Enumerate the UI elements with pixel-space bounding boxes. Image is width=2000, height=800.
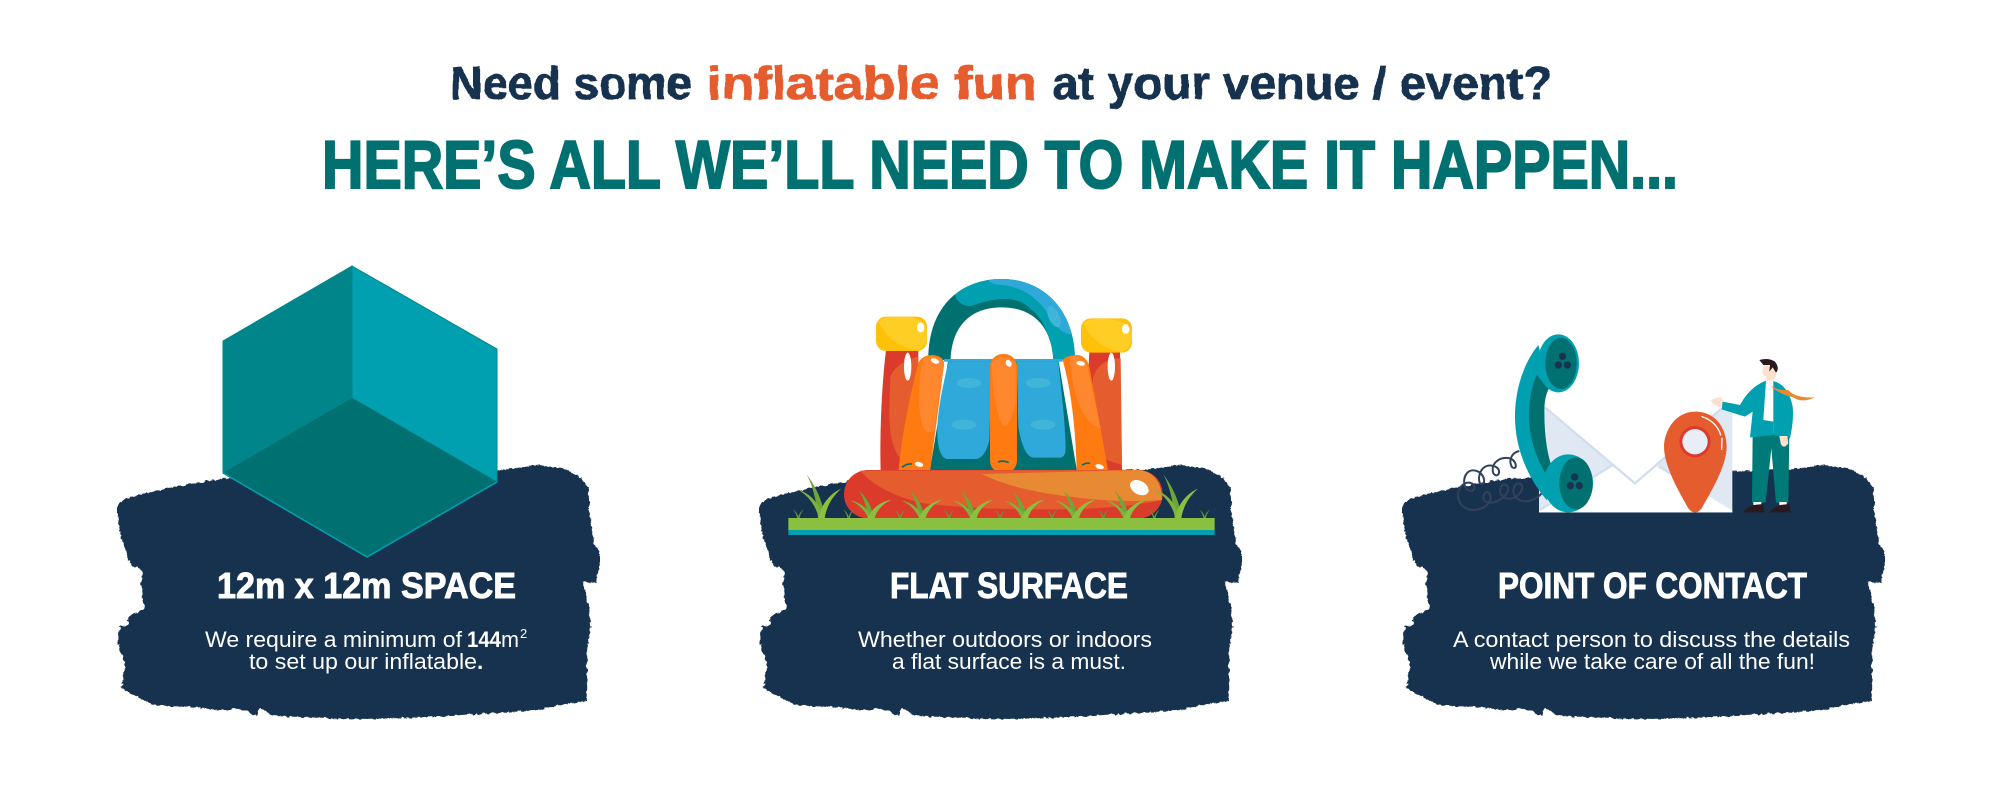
card description: We require a minimum of [205, 627, 463, 652]
card description: 144 [467, 627, 501, 652]
paint brush background [1402, 465, 1886, 719]
right column [1083, 352, 1122, 471]
envelope [1539, 400, 1732, 512]
main heading: HERE’S ALL WE’LL NEED TO MAKE IT HAPPEN... [322, 127, 1678, 203]
card description: m [501, 627, 519, 652]
panel: point of contact [1402, 334, 1886, 719]
icon: bouncy castle [788, 273, 1215, 535]
grass tufts [793, 475, 1210, 518]
left column [880, 350, 918, 473]
card description [205, 626, 527, 674]
phone cord [1458, 451, 1542, 510]
orange bars [898, 354, 1108, 473]
subtitle: inflatable fun [707, 57, 1037, 109]
location pin [1664, 412, 1727, 512]
infographic [116, 64, 1886, 720]
card description: A contact person to discuss the details [1453, 627, 1850, 652]
panel: 12m x 12m space [117, 266, 601, 719]
card description: . [477, 649, 483, 674]
card heading: FLAT SURFACE [890, 565, 1128, 606]
icon: phone, envelope, pin and person [1458, 334, 1815, 512]
card heading: 12m x 12m SPACE [217, 565, 516, 606]
panel: flat surface [759, 273, 1243, 719]
card description: a flat surface is a must. [892, 649, 1126, 674]
slide [929, 359, 1077, 473]
card description [858, 627, 1152, 674]
yellow caps [876, 317, 1132, 353]
icon: hexagon space cube [223, 266, 497, 557]
inflatable base [844, 470, 1163, 518]
paint brush background [117, 465, 601, 719]
card description: while we take care of all the fun! [1489, 649, 1815, 674]
arch [928, 273, 1080, 360]
businessman [1711, 359, 1815, 512]
paint brush background [759, 465, 1243, 719]
ground strip [788, 518, 1215, 535]
card description: to set up our inflatable [249, 649, 477, 674]
card description: Whether outdoors or indoors [858, 627, 1152, 652]
card description [1453, 627, 1850, 674]
subtitle: at your venue / event? [1052, 57, 1552, 109]
card description: 2 [520, 626, 527, 641]
handset [1515, 334, 1593, 512]
subtitle: Need some [450, 57, 692, 109]
subtitle [450, 57, 1552, 109]
card heading: POINT OF CONTACT [1498, 565, 1807, 606]
